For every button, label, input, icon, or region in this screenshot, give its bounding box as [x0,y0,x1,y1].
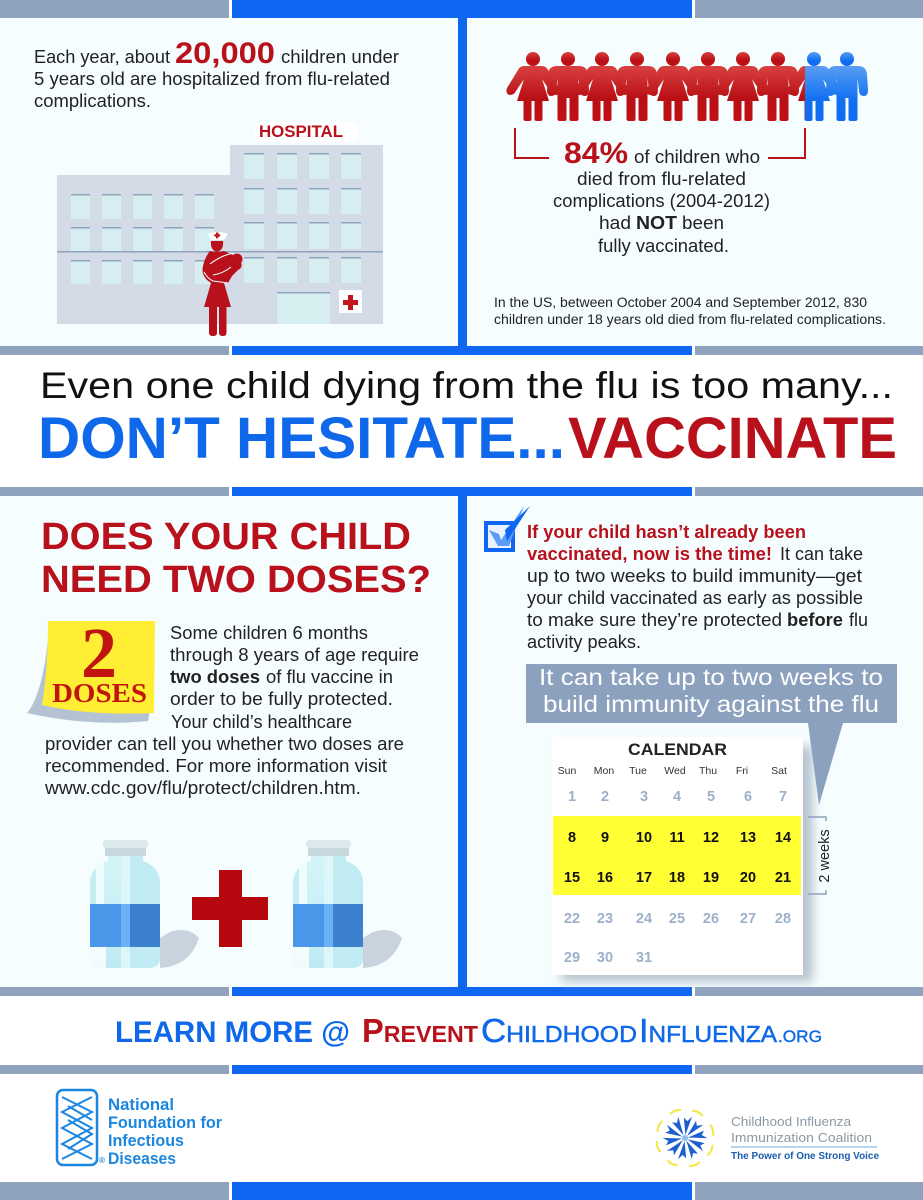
text: US deaths note [494,295,886,327]
panel: bottom right [467,496,923,987]
text: hospitalization statistic: children under [281,47,399,67]
calendar: 20 [740,870,756,886]
calendar: 1 [568,789,576,805]
text: 84 percent statistic: had [599,213,631,233]
calendar: 5 [707,789,715,805]
panel: top left [0,18,458,346]
icon: nurse holding baby [202,232,242,336]
text: two doses explanation [44,623,419,798]
calendar: Thu [699,765,717,777]
logo: National Foundation for Infectious Diseases [57,1090,222,1168]
text: two doses explanation: Your child’s healthcare [171,712,352,732]
heading: does your child need two doses: NEED TWO DOSES? [41,559,431,601]
logo: National Foundation for Infectious Diseases: ® [99,1156,105,1165]
callout: two weeks to build immunity: It can take up to two weeks to [539,664,883,690]
calendar: Mon [594,765,614,777]
icon: red plus [192,870,268,947]
bracket under people [515,128,805,158]
text: now is the time: If your child hasn’t already been [527,522,806,542]
calendar: Sat [771,765,787,777]
call to action: learn more [115,1012,822,1049]
calendar: CALENDAR [628,740,727,759]
logo: National Foundation for Infectious Diseases: Diseases [108,1149,176,1168]
text: two doses explanation: provider can tell you whether two doses are [45,734,404,754]
text: 84 percent statistic: 84% [564,137,628,170]
callout: two weeks to build immunity: build immunity against the flu [543,691,879,717]
calendar: 8 [568,830,576,846]
calendar: Wed [664,765,686,777]
call to action: learn more: INFLUENZA [639,1012,777,1049]
bracket: 2 weeks [808,817,833,894]
icon: 2 doses sticky note [27,613,155,723]
icon: left vaccine vial [90,840,199,968]
text: 84 percent statistic: of children who [634,147,760,167]
icon: 2 doses sticky note: DOSES [52,678,147,708]
heading: don't hesitate vaccinate [38,406,897,471]
icon: right vaccine vial [293,840,402,968]
illustration: hospital building: HOSPITAL [259,123,343,141]
calendar: 26 [703,911,719,927]
calendar: 11 [669,830,685,846]
text: now is the time: flu [849,610,868,630]
call to action: learn more: .ORG [778,1028,822,1046]
calendar: 23 [597,911,613,927]
text: now is the time: vaccinated, now is the time! [527,544,772,564]
calendar: 14 [775,830,791,846]
text: 84 percent statistic: fully vaccinated. [598,236,729,256]
text: two doses explanation: recommended. For more information visit [45,756,387,776]
text: now is the time: activity peaks. [527,632,641,652]
logo: Childhood Influenza Immunization Coalition: Childhood Influenza [731,1114,852,1129]
logo: National Foundation for Infectious Diseases: National [108,1095,174,1114]
logo: Childhood Influenza Immunization Coalition [656,1109,879,1167]
calendar: Fri [736,765,748,777]
panel: bottom left [0,496,458,987]
heading: don't hesitate vaccinate: DON’T HESITATE... [38,406,565,471]
calendar: Sun [558,765,576,777]
text: hospitalization statistic [34,37,399,111]
text: now is the time: before [787,610,843,630]
bracket: 2 weeks: 2 weeks [817,829,833,883]
text: two doses explanation: of flu vaccine in [266,667,393,687]
text: now is the time: your child vaccinated as early as possible [527,588,863,608]
calendar: 21 [775,870,791,886]
calendar: 22 [564,911,580,927]
panel: top right [467,18,923,346]
calendar: 30 [597,950,613,966]
calendar: 6 [744,789,752,805]
calendar: 25 [669,911,685,927]
logo: Childhood Influenza Immunization Coalition: The Power of One Strong Voice [731,1150,879,1162]
calendar: 29 [564,950,580,966]
calendar: 4 [673,789,681,805]
text: US deaths note: In the US, between October 2004 and September 2012, 830 [494,295,867,310]
callout: two weeks to build immunity [526,664,897,805]
calendar: Tue [629,765,647,777]
icon: blue checkbox [486,506,530,550]
logo: Childhood Influenza Immunization Coalition: Immunization Coalition [731,1130,872,1145]
text: 84 percent statistic: complications (2004-2012) [553,191,770,211]
text: now is the time [527,522,868,652]
calendar: 10 [636,830,652,846]
calendar: 7 [779,789,787,805]
text: hospitalization statistic: complications. [34,91,151,111]
logo: National Foundation for Infectious Diseases: Infectious [108,1131,184,1150]
text: two doses explanation: www.cdc.gov/flu/protect/children.htm. [44,778,361,798]
calendar: 28 [775,911,791,927]
calendar: 2 [601,789,609,805]
calendar: 13 [740,830,756,846]
heading: does your child need two doses: DOES YOUR CHILD [41,516,411,558]
text: now is the time: to make sure they’re protected [527,610,782,630]
text: 84 percent statistic [553,137,770,256]
text: 84 percent statistic: died from flu-related [577,169,746,189]
calendar: 3 [640,789,648,805]
illustration: hospital building [57,122,383,324]
text: two doses explanation: two doses [170,667,260,687]
text: now is the time: up to two weeks to build immunity—get [527,566,862,586]
call to action: learn more: PREVENT [362,1012,479,1049]
calendar: 27 [740,911,756,927]
call to action: learn more: CHILDHOOD [481,1012,637,1049]
calendar: 9 [601,830,609,846]
calendar: 24 [636,911,652,927]
text: two doses explanation: Some children 6 months [170,623,368,643]
text: hospitalization statistic: 5 years old are hospitalized from flu-related [34,69,390,89]
calendar [552,737,803,975]
text: US deaths note: children under 18 years old died from flu-related complications. [494,312,886,327]
calendar: 17 [636,870,652,886]
calendar: 18 [669,870,685,886]
icon row: ten people, eight and a half red [506,52,868,121]
text: hospitalization statistic: 20,000 [175,37,275,70]
heading: even one child: Even one child dying from the flu is too many... [40,365,893,406]
text: two doses explanation: through 8 years of age require [170,645,419,665]
heading: don't hesitate vaccinate: VACCINATE [568,406,897,471]
calendar shadow [561,746,813,982]
text: hospitalization statistic: Each year, about [34,47,170,67]
logo: National Foundation for Infectious Diseases: Foundation for [108,1113,222,1132]
calendar: 31 [636,950,652,966]
call to action: learn more: LEARN MORE @ [115,1016,350,1049]
text: two doses explanation: order to be fully protected. [170,689,393,709]
icon: 2 doses sticky note: 2 [81,613,117,693]
text: now is the time: It can take [780,544,863,564]
calendar: 19 [703,870,719,886]
text: 84 percent statistic: NOT [636,213,677,233]
heading: does your child need two doses [41,516,431,601]
calendar: 15 [564,870,580,886]
calendar: 16 [597,870,613,886]
text: 84 percent statistic: been [682,213,724,233]
calendar: 12 [703,830,719,846]
